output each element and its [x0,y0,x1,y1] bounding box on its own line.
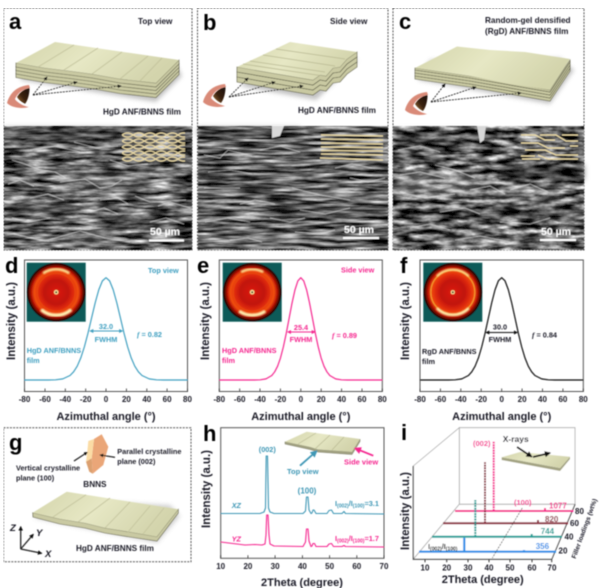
film label g: HgD ANF/BNNS film [76,544,154,553]
x tick labels d: 40 [142,395,152,404]
panel c: random-gel densified film [393,8,584,250]
diffraction pattern inset d [27,263,86,322]
x tick labels e: 40 [337,395,347,404]
annotations d: FWHM [95,335,117,344]
maroon trace 820 [443,462,568,523]
x tick labels f: 20 [518,395,527,404]
crystal plane labels [16,447,181,489]
annotations f: FWHM [489,335,511,344]
x tick labels d: -60 [39,395,51,404]
scale bar b: 50 µm [344,224,374,236]
crystal plane labels: BNNS [83,480,107,489]
peak labels h: =1.7 [364,534,379,543]
panel h letter: h [203,421,216,446]
y axis title d: Intensity (a.u.) [6,282,18,360]
film inset h [285,432,360,454]
x tick labels h: 40 [298,562,307,571]
i series labels: /I [442,542,446,551]
panel f letter: f [400,253,408,278]
i series labels: (100) [514,498,532,507]
panel c caption: Random-gel densified [485,16,571,25]
x tick labels f: -80 [414,395,426,404]
icon: BNNS flake [86,434,108,474]
x tick labels i: 70 [548,564,557,572]
illustration: layered HgD film, side view [237,42,358,100]
i series labels [428,439,567,552]
icon: eye [405,92,428,115]
x tick labels e: -60 [234,395,246,404]
x tick labels f: -20 [475,395,488,404]
annotations d: HgD ANF/BNNS [27,346,81,355]
x tick labels h [216,562,389,571]
top view arrow and label: Top view [287,467,319,476]
x tick labels h: 20 [243,562,253,571]
filler loading axis labels [559,498,599,560]
illustration: layered HgD film, top view [16,42,182,102]
x ticks d [24,388,188,392]
icon: eye [7,85,30,108]
panel f: azimuthal plot RgD film [400,253,588,423]
annotations f: f = 0.84 [532,330,558,340]
x tick labels f: 40 [538,395,547,404]
annotations e: 25.4 [294,323,309,332]
panel g letter: g [9,430,22,455]
YZ trace [221,515,384,547]
annotations e: f = 0.89 [332,331,357,340]
x tick labels i: 60 [528,564,537,572]
panel b letter: b [203,10,216,35]
annotations f: RgD ANF/BNNS [422,347,477,356]
annotations e: HgD ANF/BNNS [222,346,277,355]
peak labels h: (100) [353,538,365,544]
FWHM arrow d [90,330,122,332]
x tick labels i: 20 [442,564,452,572]
annotations e: Side view [341,266,375,274]
illustration: HgD film [33,492,180,543]
x tick labels d: -80 [19,395,31,404]
x tick labels h: 60 [352,562,362,571]
x ticks h [221,555,384,558]
x axis title e: Azimuthal angle (°) [251,411,351,423]
annotations d: film [27,356,40,365]
panel a letter: a [9,9,22,34]
plot frame h [221,428,384,558]
x tick labels h: 10 [216,562,226,571]
SEM micrograph c [393,126,584,250]
x tick labels f: -40 [455,395,467,404]
x tick labels e: 0 [299,395,304,404]
annotations d: 32.0 [99,322,113,331]
x tick labels e [214,395,387,404]
x tick labels h: 50 [325,562,335,571]
panel c letter: c [399,9,411,34]
curve f [420,278,583,380]
filler loading axis labels: Filler loadings (wt%) [571,498,599,560]
panel d: azimuthal plot top view [5,253,192,423]
x tick labels e: 60 [358,395,367,404]
x tick labels f [414,395,588,404]
x tick labels d: -40 [60,395,72,404]
dashed viewing arrows [431,84,521,102]
illustration: layered RgD film [415,46,574,104]
crystal plane labels: plane (100) [16,474,55,482]
peak labels h: (002) [259,445,276,454]
film label: HgD ANF/BNNS film [298,106,376,115]
peak labels h: (002) [337,538,349,544]
annotations f: 30.0 [493,322,507,332]
x tick labels i: 10 [421,564,430,572]
x ticks f [420,388,583,392]
cream schematic: random layers [521,135,578,159]
SEM micrograph a [4,126,192,250]
filler loading axis labels: 20 [559,546,568,556]
x tick labels i [421,564,557,572]
dashed line at (100) [492,508,522,558]
panel b: side view of HgD film [198,8,388,250]
panel a caption: Top view [138,17,173,26]
x tick labels e: -80 [214,395,226,404]
x ticks e [219,388,382,392]
i series labels: (002) [473,439,491,448]
arrows to crystal planes [74,452,115,461]
blue trace 356 [419,538,556,552]
x tick labels e: 20 [317,395,326,404]
i series labels: I [428,542,430,551]
peak labels h: /I [349,534,353,543]
panel c caption [485,16,571,36]
annotations e: film [222,356,235,365]
x tick labels i: 40 [485,564,494,572]
scale bar a [149,226,184,242]
panel g: BNNS and film orientation [4,428,191,562]
XYZ axes: Y [36,528,44,539]
XYZ axes: X [44,549,52,560]
panel e: azimuthal plot side view [197,253,387,423]
pink trace 1077 [455,442,573,511]
x axis title f: Azimuthal angle (°) [452,411,552,423]
y axis title i: Intensity (a.u.) [400,472,412,550]
panel g frame [4,428,191,562]
x tick labels d [19,395,192,404]
XZ trace [221,456,384,514]
3D chart box [413,428,575,559]
panel i: 3D XRD filler loading [400,420,599,586]
x tick labels e: -20 [275,395,287,404]
i series labels: (002) [430,546,442,552]
scale bar a: 50 µm [150,226,180,238]
x tick labels f: -60 [435,395,447,404]
curve d [24,278,188,380]
crystal plane labels: Vertical crystalline [16,464,80,472]
y axis title h: Intensity (a.u.) [201,450,213,528]
annotations d: Top view [148,266,179,275]
peak labels h: =3.1 [364,499,379,508]
panel i letter: i [401,420,407,445]
peak labels h [231,445,379,544]
XYZ axes [9,523,52,560]
x tick labels f: 0 [499,395,504,404]
film inset i with X-rays: X-rays [503,434,529,444]
panel c frame [393,8,584,250]
film inset i with X-rays [502,434,570,471]
panel e letter: e [197,253,209,278]
panel b caption: Side view [330,17,368,26]
x tick labels f: 80 [579,395,588,404]
x tick labels d: 80 [183,395,192,404]
plot frame f [420,260,583,392]
dashed viewing arrows [33,77,121,95]
x axis title i: 2Theta (degree) [442,574,524,586]
peak labels h: XZ [231,501,242,510]
peak labels h: /I [349,499,353,508]
side view arrow and label: Side view [344,458,378,466]
x tick labels e: -40 [254,395,266,404]
x tick labels f: 60 [558,395,568,404]
x tick labels h: 70 [380,562,389,571]
diffraction pattern inset e [223,263,282,322]
x tick labels h: 30 [271,562,280,571]
x tick labels d: -20 [80,395,92,404]
curve e [219,278,382,380]
diffraction pattern inset f [423,263,482,322]
x tick labels d: 20 [122,395,131,404]
plot frame e [219,260,382,392]
x axis title d: Azimuthal angle (°) [56,411,156,423]
top view arrow and label [287,451,319,476]
peak labels h: (100) [298,486,317,496]
cream schematic: honeycomb layers [122,132,185,162]
i series labels: 744 [541,527,555,536]
filler loading axis labels: 60 [570,519,579,528]
film label: HgD ANF/BNNS film [103,108,181,116]
annotations d: f = 0.82 [137,330,162,339]
peak labels h: I [335,499,337,508]
i series labels: 1077 [549,502,567,511]
x tick labels d: 60 [163,395,172,404]
i series labels: 356 [536,542,550,551]
annotations e [222,266,375,365]
FWHM arrow e [288,331,315,333]
teal trace 744 [432,500,562,537]
peak labels h: (002) [337,504,349,510]
plot frame d [24,260,188,392]
icon: eye [203,84,226,107]
SEM micrograph b [198,126,388,250]
filler loading axis labels: 80 [575,507,584,516]
peak labels h: YZ [232,534,242,544]
panel h: XRD of XZ and YZ [201,421,389,588]
x tick labels d: 0 [104,395,109,404]
crystal plane labels: Parallel crystalline [117,447,181,456]
y axis title e: Intensity (a.u.) [200,282,212,360]
scale bar c: 50 µm [541,226,571,238]
x tick labels e: 80 [378,395,387,404]
scale bar b [343,224,379,239]
peak labels h: I [335,534,337,543]
panel d letter: d [5,253,18,278]
panel a frame [4,8,192,250]
panel c caption: (RgD) ANF/BNNS film [485,27,568,36]
cream schematic: parallel layers [320,135,383,160]
i series labels: (100) [446,546,458,552]
XYZ axes: Z [9,523,17,534]
panel b frame [198,8,388,250]
scale bar c [540,226,576,241]
crystal plane labels: plane (002) [117,457,156,466]
peak labels h: (100) [353,504,365,510]
dashed viewing arrows [229,78,303,97]
chart axes i [413,466,575,562]
x tick labels i: 50 [506,564,515,572]
panel a: top view of HgD film [4,8,192,250]
y axis title f: Intensity (a.u.) [400,282,412,360]
FWHM arrow f [486,332,517,334]
x tick labels i: 30 [464,564,473,572]
annotations d [27,266,179,365]
annotations f [422,322,558,366]
annotations e: FWHM [290,335,312,344]
i series labels: 820 [545,515,559,524]
filler loading axis labels: 40 [565,532,574,542]
side view arrow and label [344,448,378,466]
annotations f: film [422,357,435,366]
